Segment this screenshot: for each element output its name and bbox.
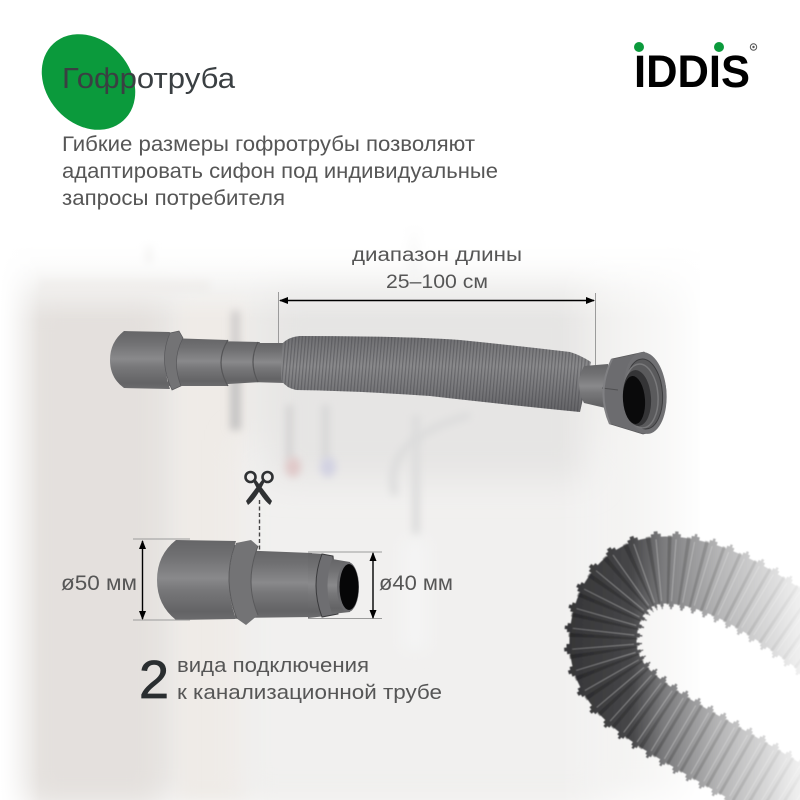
cut line bbox=[258, 500, 260, 616]
description text: запросы потребителя bbox=[62, 187, 285, 210]
connection count callout: 2 bbox=[139, 650, 169, 710]
ribbed hose bbox=[281, 336, 591, 412]
length dimension arrow bbox=[278, 292, 596, 366]
diameter 40 dimension: ø40 мм bbox=[379, 572, 453, 595]
description text: Гибкие размеры гофротрубы позволяют bbox=[62, 133, 475, 156]
diameter 50 dimension: ø50 мм bbox=[61, 572, 137, 595]
description text: адаптировать сифон под индивидуальные bbox=[62, 160, 498, 183]
diameter 50 dimension bbox=[61, 539, 190, 620]
connection count callout: вида подключения bbox=[177, 655, 369, 677]
length label: 25–100 см bbox=[386, 272, 488, 293]
corrugated hose product bbox=[110, 331, 669, 435]
title: Гофротруба bbox=[62, 63, 236, 95]
cut-to-size adapter bbox=[157, 540, 359, 625]
scissors icon bbox=[246, 472, 272, 505]
length label bbox=[352, 245, 522, 293]
connection count callout: к канализационной трубе bbox=[177, 682, 442, 704]
logo: IDDIS: IDDIS bbox=[634, 46, 750, 97]
description text bbox=[62, 133, 498, 210]
length label: диапазон длины bbox=[352, 245, 522, 266]
connection count callout bbox=[139, 650, 442, 710]
right neck bbox=[579, 364, 614, 410]
green blob bbox=[22, 15, 155, 149]
left adapter bbox=[110, 331, 284, 390]
corrugated bellows close-up bbox=[603, 570, 800, 800]
threaded nut bbox=[602, 351, 669, 435]
